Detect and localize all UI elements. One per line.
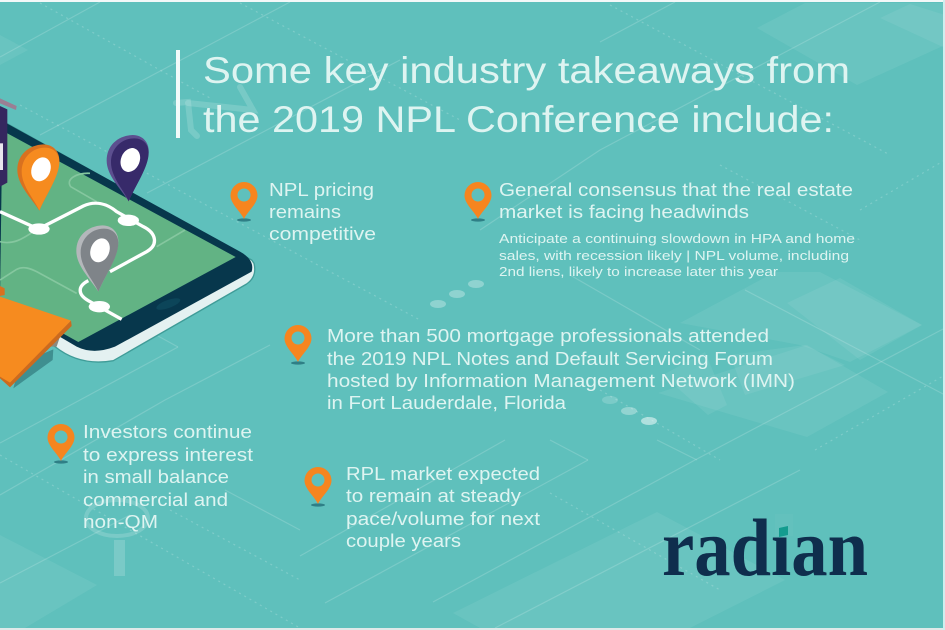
text: to express interest: [83, 444, 253, 465]
takeaway: attendance: [284, 325, 795, 413]
decorative dots upper: [430, 280, 484, 308]
logo: radian: radian: [662, 502, 868, 593]
detail text: sales, with recession likely | NPL volume, including: [499, 248, 849, 263]
text: competitive: [269, 223, 376, 244]
title text: Some key industry takeaways from: [203, 50, 850, 91]
ghost network icon behind title: [176, 87, 253, 136]
tablet shadow and edge: [0, 120, 255, 362]
icon: location pin: [48, 424, 74, 464]
orange panel: [0, 286, 72, 388]
text: More than 500 mortgage professionals attended: [327, 325, 769, 346]
takeaway: investors: [48, 421, 253, 532]
title with rule: [176, 50, 850, 140]
text: [269, 179, 376, 244]
detail text: [499, 231, 855, 279]
text: commercial and: [83, 489, 228, 510]
text: [327, 325, 795, 413]
takeaway: RPL market: [304, 463, 540, 551]
icon: location pin: [230, 182, 258, 222]
detail text: 2nd liens, likely to increase later this year: [499, 264, 779, 279]
text: RPL market expected: [346, 463, 540, 484]
purple map pin: [107, 135, 149, 201]
text: [83, 421, 253, 532]
title text: the 2019 NPL Conference include:: [203, 99, 834, 140]
decorative dots lower: [602, 396, 657, 425]
text: non-QM: [83, 511, 158, 532]
heading text: General consensus that the real estate: [499, 179, 853, 200]
white route with stops: [0, 203, 154, 319]
heading text: market is facing headwinds: [499, 201, 749, 222]
home button: [155, 296, 182, 312]
text: pace/volume for next: [346, 508, 540, 529]
text: [346, 463, 540, 551]
map screen: [0, 131, 236, 342]
title rule: [176, 50, 180, 138]
text: the 2019 NPL Notes and Default Servicing Forum: [327, 348, 773, 369]
heading text: [499, 179, 853, 222]
title text: [203, 50, 850, 140]
text: Investors continue: [83, 421, 252, 442]
takeaway: NPL pricing: [230, 179, 376, 244]
text: in Fort Lauderdale, Florida: [327, 392, 567, 413]
illustration: tablet with map: [0, 98, 255, 388]
takeaway: real estate headwinds: [464, 179, 855, 279]
tablet body: [0, 120, 252, 351]
text: hosted by Information Management Network (IMN): [327, 370, 795, 391]
faint map routes: [0, 173, 185, 293]
text: remains: [269, 201, 341, 222]
purple building: [0, 98, 17, 187]
detail text: Anticipate a continuing slowdown in HPA and home: [499, 231, 855, 246]
text: in small balance: [83, 466, 229, 487]
orange map pin: [17, 144, 59, 211]
icon: location pin: [284, 325, 312, 365]
grey map pin: [76, 225, 118, 292]
icon: location pin: [464, 182, 492, 222]
ghost magnifying glass: [86, 500, 148, 576]
text: couple years: [346, 530, 461, 551]
text: NPL pricing: [269, 179, 374, 200]
icon: location pin: [304, 467, 332, 507]
text: to remain at steady: [346, 485, 522, 506]
